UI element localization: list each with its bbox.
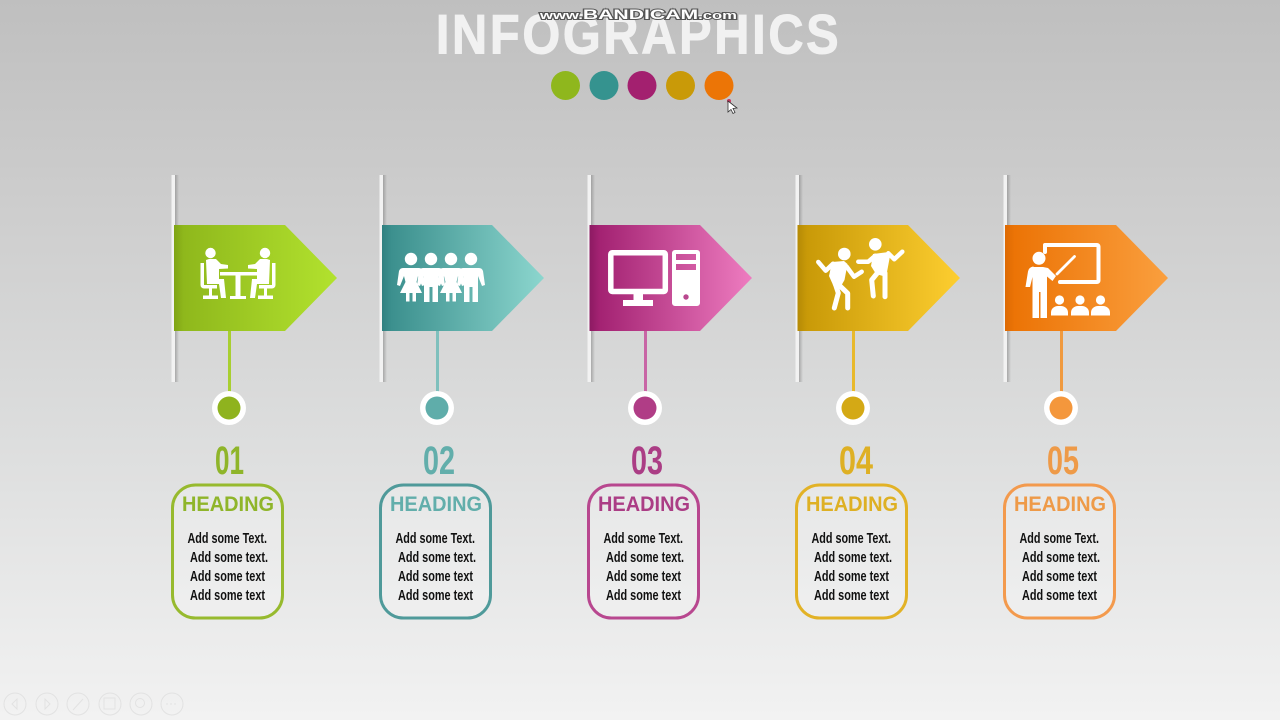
body text 3: Add some Text. <box>604 530 683 547</box>
connector line 4 <box>852 331 855 396</box>
number 02: 02 <box>423 439 455 483</box>
text box 2 <box>380 485 490 618</box>
body text 5: Add some Text. <box>1020 530 1099 547</box>
connector line 5 <box>1060 331 1063 396</box>
icon: meeting at table <box>200 248 276 299</box>
panel: step 5 <box>1004 175 1168 618</box>
arrow flag 1 <box>174 225 337 331</box>
body text 5: Add some text. <box>1022 549 1100 566</box>
body text 3: Add some text <box>606 587 681 604</box>
body text 1: Add some text. <box>190 549 268 566</box>
icon: group of people <box>397 253 485 302</box>
node 2 <box>420 391 454 425</box>
arrow flag 3 <box>590 225 752 331</box>
heading 5: HEADING <box>1014 493 1106 516</box>
body text 4 <box>812 530 892 604</box>
flag pole 4 <box>796 175 803 382</box>
panel: step 3 <box>588 175 752 618</box>
body text 3 <box>604 530 684 604</box>
body text 4: Add some text. <box>814 549 892 566</box>
flag pole 1 <box>172 175 179 382</box>
body text 1: Add some Text. <box>188 530 267 547</box>
body text 3: Add some text. <box>606 549 684 566</box>
connector line 2 <box>436 331 439 396</box>
node 1 <box>212 391 246 425</box>
number 01: 01 <box>215 439 244 483</box>
connector line 1 <box>228 331 231 396</box>
panel: step 4 <box>796 175 960 618</box>
flag pole 5 <box>1004 175 1011 382</box>
connector line 3 <box>644 331 647 396</box>
body text 5: Add some text <box>1022 587 1097 604</box>
body text 1: Add some text <box>190 587 265 604</box>
flag pole 3 <box>588 175 595 382</box>
title: INFOGRAPHICS <box>436 3 839 66</box>
flag pole 2 <box>380 175 387 382</box>
body text 5: Add some text <box>1022 568 1097 585</box>
body text 4: Add some Text. <box>812 530 891 547</box>
heading 3: HEADING <box>598 493 690 516</box>
body text 3: Add some text <box>606 568 681 585</box>
number 04: 04 <box>839 439 874 483</box>
icon: dancers <box>818 238 902 308</box>
text box 3 <box>588 485 698 618</box>
node 5 <box>1044 391 1078 425</box>
arrow flag 2 <box>382 225 544 331</box>
body text 2: Add some text <box>398 568 473 585</box>
body text 2: Add some text <box>398 587 473 604</box>
slideshow toolbar <box>4 693 183 715</box>
heading 2: HEADING <box>390 493 482 516</box>
body text 2: Add some text. <box>398 549 476 566</box>
watermark: www. BANDICAM .com <box>538 6 737 22</box>
heading 4: HEADING <box>806 493 898 516</box>
text box 1 <box>172 485 282 618</box>
panel: step 1 <box>172 175 337 618</box>
text box 4 <box>796 485 906 618</box>
body text 5 <box>1020 530 1100 604</box>
arrow flag 4 <box>798 225 960 331</box>
body text 4: Add some text <box>814 568 889 585</box>
icon: desktop computer <box>611 250 700 306</box>
body text 2 <box>396 530 476 604</box>
body text 1: Add some text <box>190 568 265 585</box>
icon: teacher at board <box>1026 245 1110 318</box>
panel: step 2 <box>380 175 544 618</box>
body text 2: Add some Text. <box>396 530 475 547</box>
text box 5 <box>1004 485 1114 618</box>
number 03: 03 <box>631 439 663 483</box>
number 05: 05 <box>1047 439 1079 483</box>
node 3 <box>628 391 662 425</box>
arrow flag 5 <box>1005 225 1168 331</box>
body text 4: Add some text <box>814 587 889 604</box>
icon: mouse cursor <box>727 99 737 114</box>
heading 1: HEADING <box>182 493 274 516</box>
body text 1 <box>188 530 268 604</box>
colour dots <box>551 71 734 100</box>
node 4 <box>836 391 870 425</box>
